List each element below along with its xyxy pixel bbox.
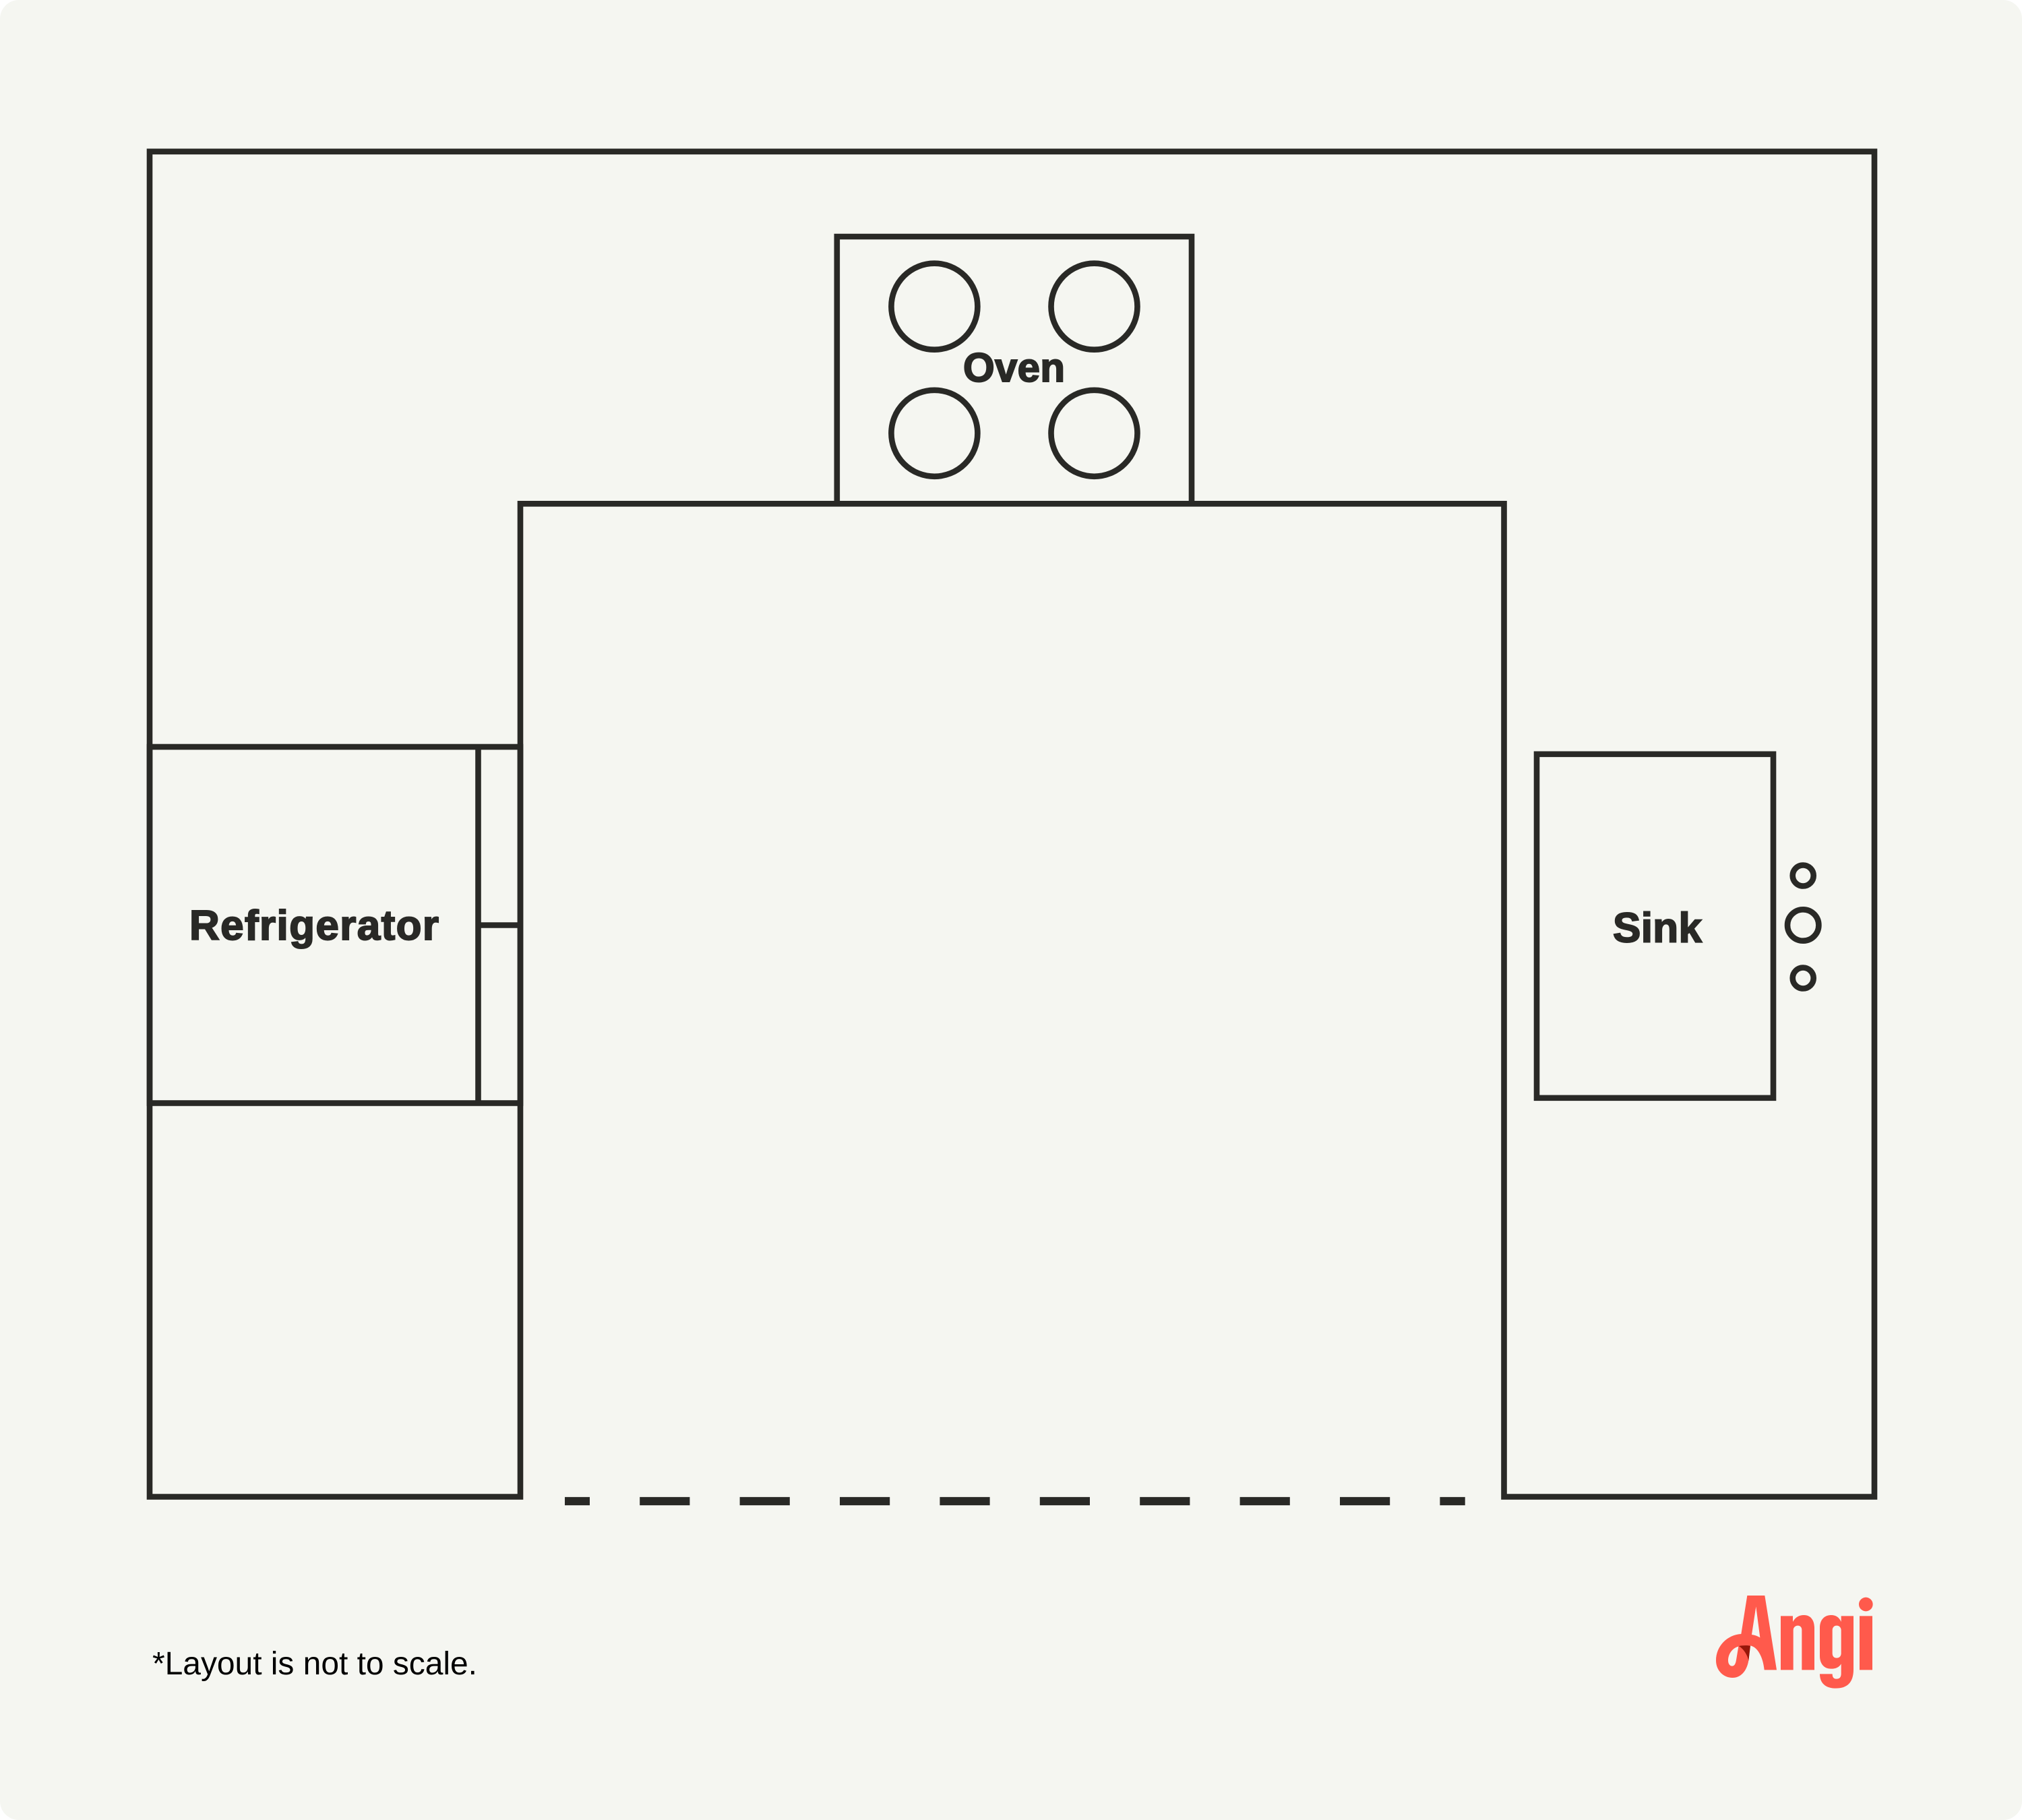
oven label: Oven — [963, 345, 1065, 390]
refrigerator door divider — [475, 747, 481, 1103]
logo: Angi — [1716, 1596, 1873, 1689]
oven box — [837, 237, 1192, 504]
faucet handle: bottom — [1793, 968, 1814, 988]
refrigerator — [150, 747, 520, 1103]
letter A with loop — [1716, 1596, 1777, 1678]
oven — [837, 237, 1192, 504]
sink — [1537, 754, 1818, 1098]
burner: bottom left — [891, 390, 977, 477]
faucet — [1787, 909, 1818, 941]
burner: top right — [1051, 264, 1138, 350]
sink label: Sink — [1613, 905, 1703, 952]
burner: top left — [891, 264, 977, 350]
open side dashed line — [565, 1497, 1465, 1505]
letter g — [1820, 1615, 1854, 1689]
letter i — [1859, 1598, 1873, 1670]
floor plan — [150, 152, 1874, 1501]
footnote: *Layout is not to scale. — [152, 1646, 477, 1682]
loop fold shadow — [1739, 1645, 1750, 1661]
burner: bottom right — [1051, 390, 1138, 477]
room outline and U-shaped counters — [150, 152, 1874, 1496]
refrigerator box — [150, 747, 520, 1103]
refrigerator door split — [479, 922, 520, 928]
refrigerator label: Refrigerator — [189, 903, 439, 949]
faucet handle: top — [1793, 866, 1814, 886]
sink basin — [1537, 754, 1773, 1098]
letter n — [1781, 1615, 1814, 1670]
